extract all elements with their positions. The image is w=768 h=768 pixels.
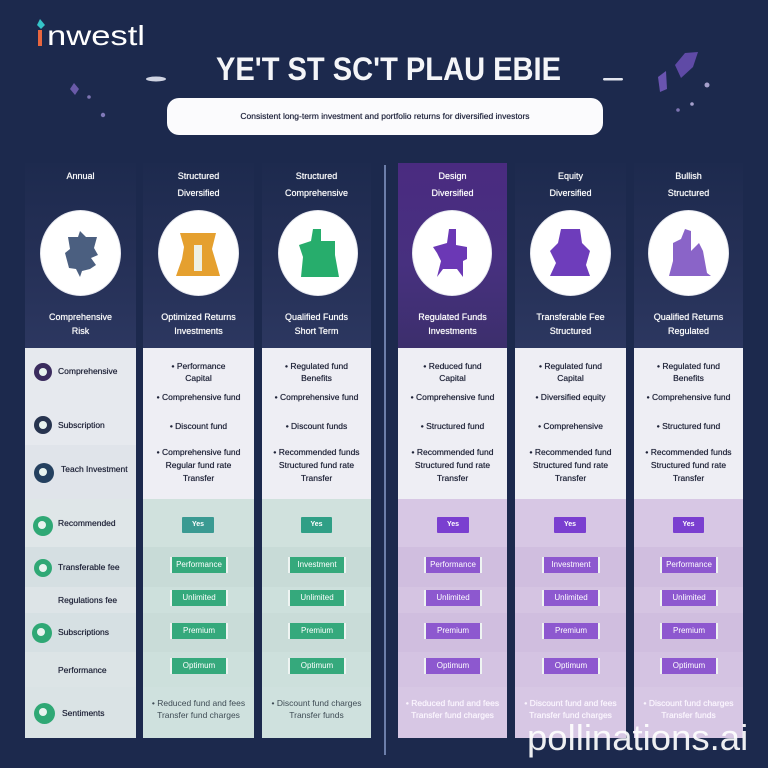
column 4: purple highlighted plan: Capital	[439, 373, 466, 383]
badge	[182, 517, 214, 533]
column 3: green plan: • Recommended funds	[273, 447, 360, 457]
column 5: purple plan	[515, 171, 626, 738]
column 6: purple plan: Structured	[668, 188, 709, 198]
row icon 7	[32, 623, 52, 643]
column 6: purple plan: • Recommended funds	[645, 447, 732, 457]
tag 2	[542, 590, 600, 606]
column 2: green plan	[143, 171, 254, 738]
tag 3	[542, 623, 600, 639]
tag 3: Premium	[555, 626, 587, 635]
decorative confetti left	[70, 76, 166, 118]
tag 1	[288, 557, 346, 573]
tag 3: Premium	[183, 626, 215, 635]
tag 1	[170, 557, 228, 573]
icon: gold	[159, 211, 238, 295]
column 5: purple plan: Diversified	[549, 188, 592, 198]
icon: violet	[531, 211, 610, 295]
column 6: purple plan: • Discount fund charges	[644, 698, 733, 708]
tag 2	[288, 590, 346, 606]
tag 1: Investment	[297, 560, 337, 569]
column 2: green plan: Structured	[178, 171, 219, 181]
column 3: green plan: Qualified Funds	[285, 312, 348, 322]
row icon 5	[34, 559, 52, 577]
column 1: row labels: Comprehensive	[58, 366, 118, 376]
column 1: row labels: Recommended	[58, 518, 116, 528]
column 6: purple plan: Regulated	[668, 326, 709, 336]
subtitle text: Consistent long-term investment and portfolio returns for diversified investors	[240, 111, 530, 121]
column 3: green plan: Structured	[296, 171, 337, 181]
tag 4: Optimum	[183, 661, 215, 670]
tag 4: Optimum	[673, 661, 705, 670]
column 1: row labels: Comprehensive	[49, 312, 112, 322]
tag 1	[660, 557, 718, 573]
icon: puzzle slate	[41, 211, 120, 295]
column 5: purple plan: Transferable Fee	[536, 312, 605, 322]
badge: Yes	[682, 521, 695, 528]
column 3: green plan: Comprehensive	[285, 188, 348, 198]
tag 3	[424, 623, 482, 639]
column 4: purple highlighted plan: Structured fund rate	[415, 460, 490, 470]
tag 1: Performance	[666, 560, 712, 569]
column 4: purple highlighted plan: Transfer	[437, 473, 468, 483]
column 3: green plan: Transfer	[301, 473, 332, 483]
column 5: purple plan: • Recommended fund	[530, 447, 611, 457]
column 5: purple plan: • Discount fund and fees	[524, 698, 617, 708]
column 5: purple plan: • Regulated fund	[539, 361, 602, 371]
row label 6: Regulations fee	[58, 595, 117, 605]
column 4: purple highlighted plan: Regulated Funds	[418, 312, 487, 322]
column 3: green plan	[262, 171, 371, 738]
tag 2	[424, 590, 482, 606]
column 4: purple highlighted plan: Design	[438, 171, 466, 181]
tag 4: Optimum	[301, 661, 333, 670]
column 5: purple plan: Structured fund rate	[533, 460, 608, 470]
tag 2	[170, 590, 228, 606]
decorative confetti right	[602, 52, 710, 112]
column 3: green plan: Transfer funds	[289, 710, 344, 720]
column 6: purple plan: • Regulated fund	[657, 361, 720, 371]
column 4: purple highlighted plan: • Structured fund	[421, 421, 484, 431]
column 4: purple highlighted plan: Transfer fund charges	[411, 710, 494, 720]
column 3: green plan: Structured fund rate	[279, 460, 354, 470]
column 5: purple plan: Equity	[558, 171, 583, 181]
tag 1: Performance	[430, 560, 476, 569]
tag 2: Unlimited	[554, 593, 588, 602]
column 5: purple plan: Transfer fund charges	[529, 710, 612, 720]
badge: Yes	[447, 521, 459, 528]
column 2: green plan: • Comprehensive fund	[157, 447, 240, 457]
column 6: purple plan: • Structured fund	[657, 421, 720, 431]
tag 3: Premium	[437, 626, 469, 635]
column 2: green plan: Transfer	[183, 473, 214, 483]
column 2: green plan: Optimized Returns	[161, 312, 236, 322]
tag 2	[660, 590, 718, 606]
tag 4: Optimum	[555, 661, 587, 670]
icon: green	[279, 211, 357, 295]
row icon 3	[34, 463, 54, 483]
column 5: purple plan: • Diversified equity	[535, 392, 606, 402]
tag 3	[660, 623, 718, 639]
subtitle pill	[167, 98, 603, 135]
tag 1	[424, 557, 482, 573]
tag 4	[660, 658, 718, 674]
column 6: purple plan: Qualified Returns	[654, 312, 723, 322]
column 3: green plan: • Discount fund charges	[272, 698, 361, 708]
column 1: row labels: Risk	[72, 326, 89, 336]
column 4: purple highlighted plan: Diversified	[431, 188, 474, 198]
badge: Yes	[564, 521, 576, 528]
row label 8: Performance	[58, 665, 107, 675]
column 2: green plan: Regular fund rate	[166, 460, 231, 470]
badge	[301, 517, 332, 533]
column 6: purple plan: Benefits	[673, 373, 704, 383]
center divider	[384, 165, 386, 755]
tag 4	[424, 658, 482, 674]
column 4: purple highlighted plan: Investments	[428, 326, 477, 336]
column 4: purple highlighted plan: • Reduced fund and fees	[406, 698, 499, 708]
tag 4	[542, 658, 600, 674]
tag 4	[288, 658, 346, 674]
column 6: purple plan: • Comprehensive fund	[647, 392, 730, 402]
column 5: purple plan: • Comprehensive	[538, 421, 603, 431]
tag 4	[170, 658, 228, 674]
tag 1: Performance	[176, 560, 222, 569]
column 5: purple plan: Transfer	[555, 473, 586, 483]
column 6: purple plan: Transfer	[673, 473, 704, 483]
badge: Yes	[310, 521, 323, 528]
column 3: green plan: • Regulated fund	[285, 361, 348, 371]
column 2: green plan: Capital	[185, 373, 212, 383]
watermark: pollinations.ai	[527, 717, 748, 758]
logo: nwestl	[47, 20, 145, 51]
tag 3: Premium	[673, 626, 705, 635]
column 3: green plan: Short Term	[295, 326, 338, 336]
icon: purple	[413, 211, 491, 295]
column 1: row labels: Subscriptions	[58, 627, 109, 637]
row icon 2	[34, 416, 52, 434]
row icon 1	[34, 363, 52, 381]
tag 1	[542, 557, 600, 573]
column 6: purple plan	[634, 171, 743, 738]
column 4: purple highlighted plan: • Recommended fund	[412, 447, 493, 457]
badge	[437, 517, 469, 533]
column 1: row labels: Annual	[66, 171, 95, 181]
icon: lilac	[649, 211, 728, 295]
column 1: row labels: Teach Investment	[61, 464, 128, 474]
column 2: green plan: Transfer fund charges	[157, 710, 240, 720]
tag 4: Optimum	[437, 661, 469, 670]
column 3: green plan: • Discount funds	[286, 421, 347, 431]
column 2: green plan: • Comprehensive fund	[157, 392, 240, 402]
column 2: green plan: • Performance	[172, 361, 226, 371]
column 5: purple plan: Capital	[557, 373, 584, 383]
column 4: purple highlighted plan	[398, 163, 507, 738]
tag 2: Unlimited	[182, 593, 216, 602]
badge: Yes	[192, 521, 204, 528]
column 4: purple highlighted plan: • Reduced fund	[423, 361, 482, 371]
column 6: purple plan: Structured fund rate	[651, 460, 726, 470]
column 2: green plan: Investments	[174, 326, 223, 336]
column 4: purple highlighted plan: • Comprehensive fund	[411, 392, 494, 402]
column 2: green plan: • Reduced fund and fees	[152, 698, 245, 708]
column 2: green plan: Diversified	[177, 188, 220, 198]
column 3: green plan: Benefits	[301, 373, 332, 383]
tag 3	[288, 623, 346, 639]
row icon 9	[34, 703, 55, 724]
badge	[554, 517, 586, 533]
tag 2: Unlimited	[436, 593, 470, 602]
tag 3	[170, 623, 228, 639]
tag 2: Unlimited	[672, 593, 706, 602]
column 2: green plan: • Discount fund	[170, 421, 227, 431]
column 3: green plan: • Comprehensive fund	[275, 392, 358, 402]
tag 3: Premium	[301, 626, 333, 635]
row icon 4	[33, 516, 53, 536]
column 6: purple plan: Transfer funds	[661, 710, 716, 720]
column 1: row labels	[25, 171, 136, 738]
column 5: purple plan: Structured	[550, 326, 591, 336]
badge	[673, 517, 704, 533]
column 1: row labels: Transferable fee	[58, 562, 120, 572]
tag 1: Investment	[551, 560, 591, 569]
column 6: purple plan: Bullish	[675, 171, 702, 181]
column 1: row labels: Sentiments	[62, 708, 105, 718]
tag 2: Unlimited	[300, 593, 334, 602]
column 1: row labels: Subscription	[58, 420, 105, 430]
